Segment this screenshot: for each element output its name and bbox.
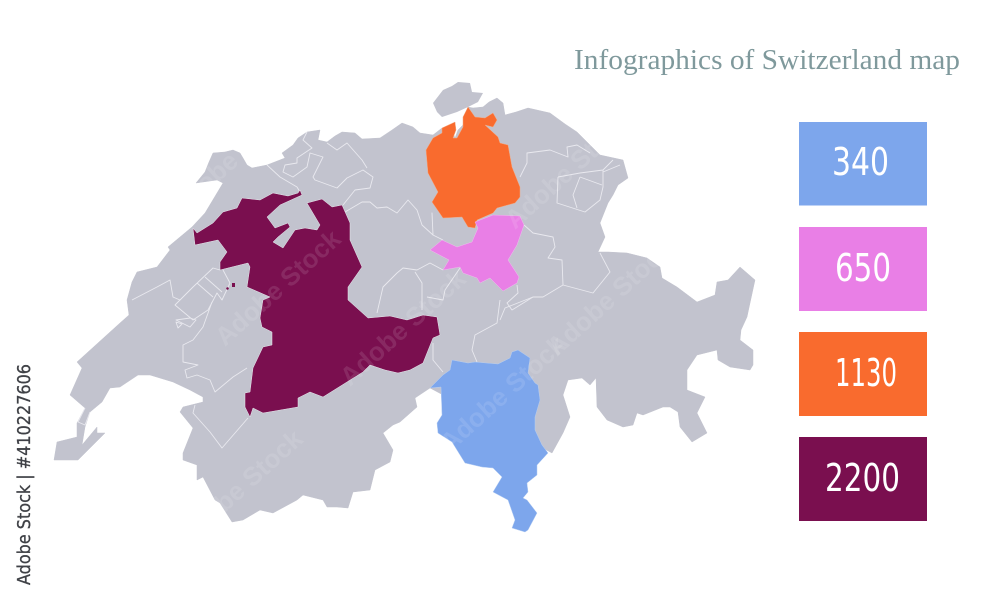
legend box: 650	[799, 227, 927, 311]
watermarks	[164, 93, 679, 551]
watermarks: Adobe Stock	[171, 423, 309, 551]
legend box: 2200	[799, 437, 927, 521]
legend box: 1130: 1130	[835, 351, 897, 395]
legend box: 650: 650	[835, 246, 891, 290]
Bern enclave dots	[226, 283, 235, 290]
watermarks: Adobe Stock	[499, 106, 637, 234]
watermarks: Adobe Stock	[334, 263, 472, 391]
legend box: 1130	[799, 332, 927, 416]
watermarks: Adobe Stock	[209, 223, 347, 351]
map of Switzerland	[54, 82, 755, 532]
watermarks: Adobe Stock	[541, 233, 679, 361]
title: Infographics of Switzerland map	[574, 45, 960, 76]
side credit text: Adobe Stock | #410227606	[14, 364, 35, 585]
highlighted canton: Zurich	[426, 107, 520, 228]
legend box: 340: 340	[832, 140, 889, 184]
legend box: 340	[799, 122, 927, 206]
canton borders	[78, 132, 620, 448]
highlighted canton: Nidwalden/Schwyz area	[430, 215, 524, 291]
highlighted canton: Ticino	[430, 350, 548, 532]
legend box: 2200: 2200	[825, 456, 900, 500]
region: Switzerland base land	[54, 98, 755, 522]
region: Schaffhausen enclave	[433, 82, 483, 117]
watermarks: Adobe Stock	[434, 329, 572, 457]
highlighted canton: Bern	[193, 190, 440, 417]
watermarks: Adobe Stock	[164, 93, 302, 221]
